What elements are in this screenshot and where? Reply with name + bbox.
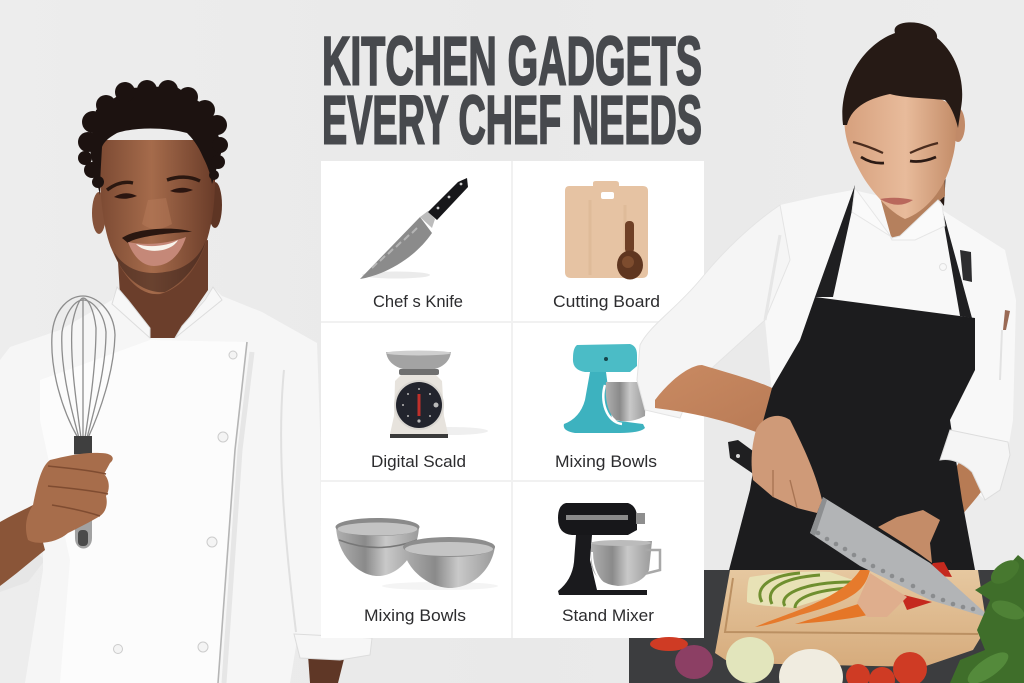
right forearm (915, 455, 992, 540)
coat buttons (114, 351, 237, 654)
label: Mixing Bowls: Mixing Bowls (555, 452, 657, 471)
apron straps (815, 185, 972, 318)
cell: cutting board (553, 181, 660, 311)
cutting board (715, 570, 987, 667)
fingers (857, 573, 907, 617)
coat front flap (40, 340, 247, 683)
cell: digital scale (371, 350, 488, 471)
white onion (779, 649, 843, 683)
knife handle (728, 440, 806, 510)
icon: black stand mixer (558, 503, 660, 595)
face features (853, 142, 938, 153)
carrots (755, 570, 870, 627)
left sleeve (637, 205, 790, 418)
icon: steel bowls (336, 518, 498, 590)
cabbage (726, 637, 774, 683)
label: Stand Mixer: Stand Mixer (562, 606, 654, 625)
panel: gadget grid (321, 161, 704, 638)
label: Cutting Board: Cutting Board (553, 292, 660, 311)
knife blade (810, 497, 992, 619)
label: Mixing Bowls: Mixing Bowls (364, 606, 466, 625)
cell: chef's knife (360, 178, 468, 311)
pen on sleeve (1003, 310, 1010, 330)
red onion (675, 645, 713, 679)
tomatoes (650, 637, 927, 683)
hair (78, 80, 228, 195)
hand (26, 453, 113, 543)
chef woman cutting vegetables (629, 22, 1024, 683)
ear (951, 108, 965, 142)
face features (107, 177, 200, 190)
red pepper (900, 562, 952, 610)
forearm (0, 505, 45, 586)
coat cuff (294, 634, 372, 660)
table (629, 570, 1024, 683)
jacket torso and right sleeve (760, 190, 1016, 500)
label: Chef's Knife: Chef s Knife (373, 292, 463, 311)
collar (112, 287, 222, 338)
icon: wooden spoon (617, 221, 643, 280)
zucchini slices (747, 572, 853, 608)
neck (118, 240, 208, 338)
neck (878, 150, 945, 240)
ears (92, 192, 106, 234)
title (322, 22, 702, 158)
head (844, 91, 956, 219)
chef man with whisk (0, 80, 372, 683)
hair (842, 22, 962, 128)
icon: chef's knife (360, 178, 468, 279)
cell: mixing bowls (336, 518, 498, 625)
chef coat (0, 287, 372, 683)
title: EVERY CHEF NEEDS (322, 82, 702, 158)
mouth (122, 229, 192, 243)
left forearm (655, 365, 790, 432)
cell: teal mixer (555, 344, 657, 471)
collar (852, 188, 945, 240)
icon: teal stand mixer (564, 344, 646, 433)
cell: stand mixer (558, 503, 660, 625)
hand on knife (752, 416, 822, 513)
apron (729, 297, 975, 570)
left sleeve cuff (0, 520, 45, 592)
right forearm below cuff (308, 655, 345, 683)
title: KITCHEN GADGETS (322, 22, 702, 100)
icon: cutting board (565, 181, 648, 278)
hand guiding blade (878, 510, 940, 563)
jacket flap button (940, 264, 946, 270)
head (100, 140, 215, 294)
back hair strand (938, 170, 946, 206)
whisk handle (74, 436, 92, 548)
icon: kitchen scale (386, 350, 488, 438)
whisk wires (52, 296, 115, 438)
sleeve cuff (940, 430, 1010, 500)
stubble (114, 240, 206, 292)
greens (950, 555, 1024, 683)
label: Digital Scald: Digital Scald (371, 452, 466, 471)
